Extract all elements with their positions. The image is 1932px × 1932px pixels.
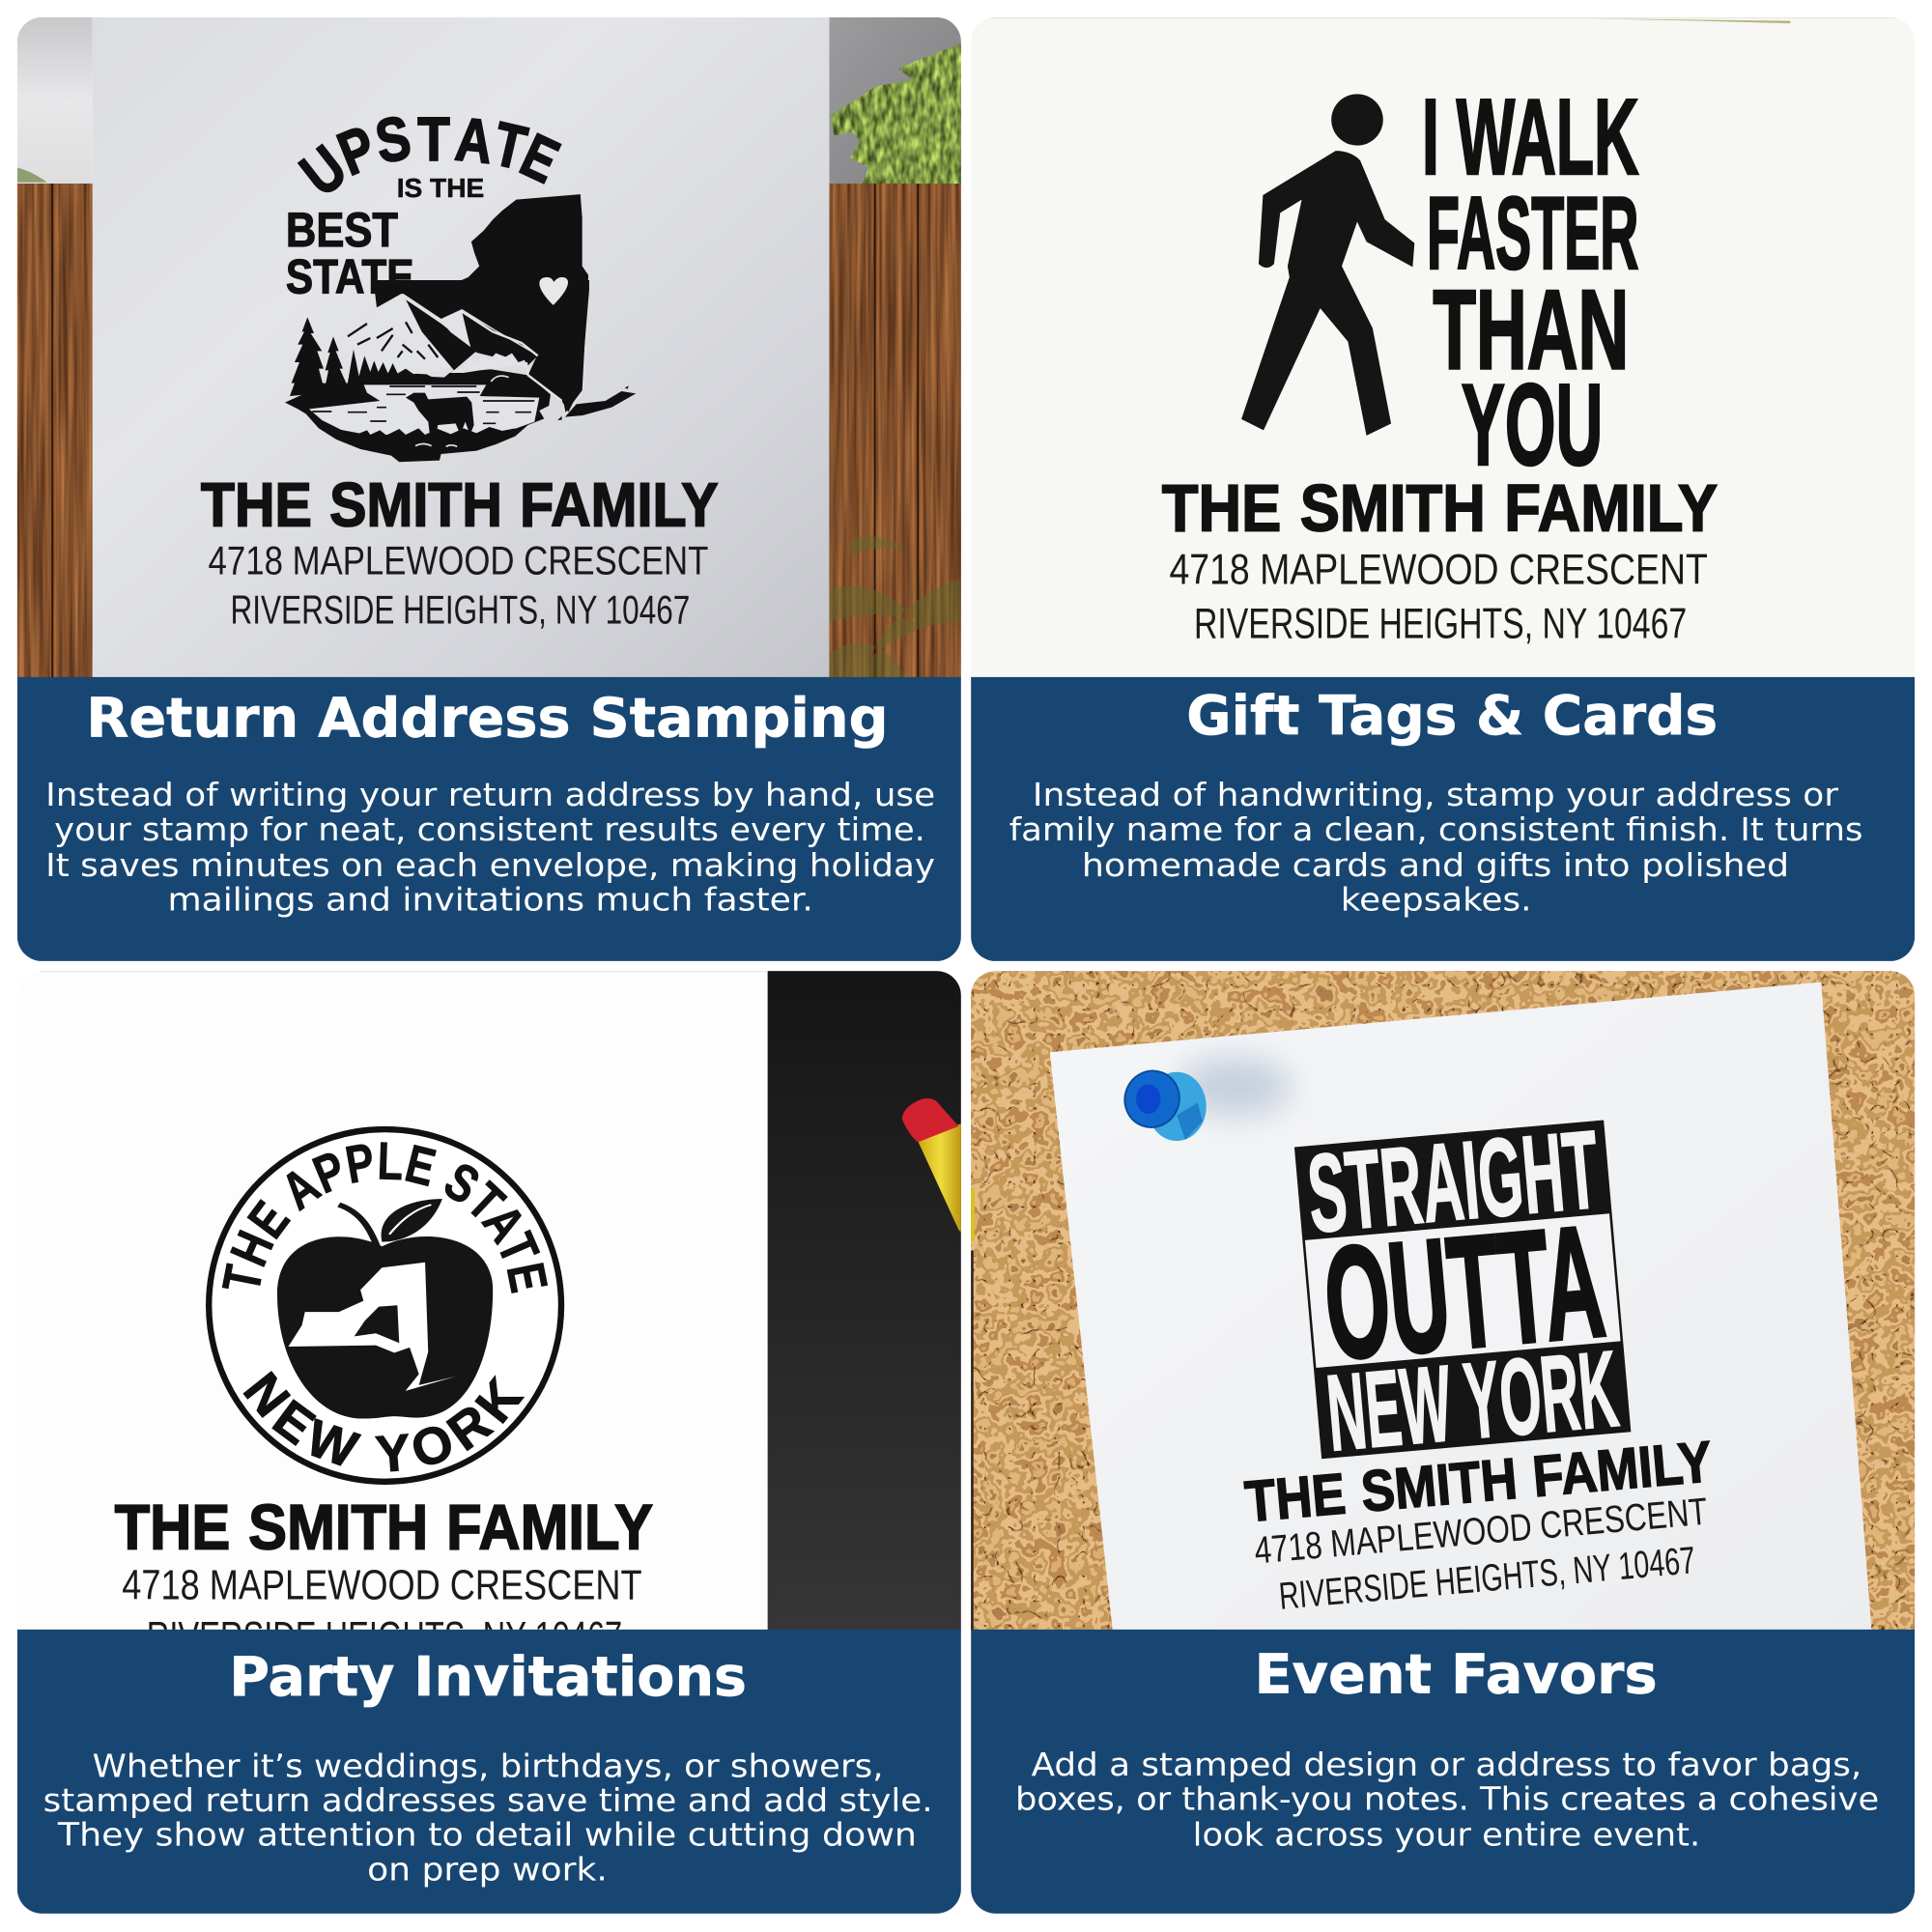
panel: Party Invitations [17,971,961,1914]
lower black landscape [285,350,551,462]
address line 2: RIVERSIDE HEIGHTS, NY 10467 [1277,1539,1697,1618]
label: BEST STATE [286,212,412,295]
black text box [1293,1107,1633,1475]
heading: Event Favors [1254,1644,1658,1707]
description: Whether it’s weddings, birthdays, or showers, [93,1747,884,1784]
description: family name for a clean, consistent finish. It turns [1009,811,1863,848]
icon: apple with New York state [277,1199,493,1419]
description [1015,1747,1879,1854]
mountains [352,350,426,375]
label: BEST STATE: STATE [286,250,414,304]
curved heading: UPSTATE: P [329,113,385,189]
illustration: New York state outline [462,194,589,412]
address line 2 (cut off): RIVERSIDE HEIGHTS, NY 10467 [147,1614,622,1661]
address line 2: RIVERSIDE HEIGHTS, NY 10467 [231,586,690,632]
description: boxes, or thank-you notes. This creates a cohesive [1015,1781,1879,1818]
curved heading: UPSTATE: T [487,109,532,184]
description: It saves minutes on each envelope, making holiday [45,847,935,884]
heading: Return Address Stamping [86,688,889,751]
stamp artwork: Straight Outta New York [1242,1107,1715,1618]
stamp artwork: I walk faster than you [1162,77,1718,648]
description [43,1747,933,1888]
heading: Gift Tags & Cards [1186,685,1718,748]
slogan: YOU [1462,360,1603,490]
photo: white card, dark surface and pencil [17,971,963,1631]
address line 1: 4718 MAPLEWOOD CRESCENT [1169,547,1708,594]
caption box [17,677,961,962]
black text box: NEW YORK [1322,1327,1623,1474]
trees [290,317,348,396]
description: stamped return addresses save time and add style. [43,1782,933,1819]
caption box [17,1630,961,1915]
family name: THE SMITH FAMILY [201,470,719,540]
caption box [971,1630,1915,1915]
photo: card background [971,17,1915,678]
slogan: THAN [1433,266,1629,392]
family name: THE SMITH FAMILY [1162,471,1718,546]
word: OUTTA: OUTTA [1318,1191,1610,1393]
address line 2: RIVERSIDE HEIGHTS, NY 10467 [1194,601,1687,648]
description: mailings and invitations much faster. [167,882,813,919]
word: STRAIGHT: STRAIGHT [1303,1108,1604,1256]
stamp artwork: The Apple State seal [114,1126,653,1630]
description: on prep work. [367,1851,608,1888]
description [1009,777,1863,919]
curved heading: UPSTATE: U [288,132,359,210]
icon: walking figure [1241,94,1414,436]
slogan: I WALK [1422,77,1638,197]
illustration: mountain lake scene [285,280,636,462]
icon: pencil [902,1098,963,1235]
description: keepsakes. [1341,882,1531,919]
address line 1: 4718 MAPLEWOOD CRESCENT [209,537,708,582]
slogan: FASTER [1427,175,1638,291]
family name: THE SMITH FAMILY [115,1492,653,1563]
curved text: THE APPLE STATE: THE APPLE STATE [222,1142,549,1293]
rock [483,396,551,397]
description: homemade cards and gifts into polished [1082,847,1789,884]
label: BEST STATE: BEST [286,203,398,257]
panel: Return Address Stamping [17,17,962,962]
curved heading: UPSTATE: E [511,121,569,197]
curved heading: UPSTATE [298,116,562,193]
label: IS THE: IS THE [397,173,484,203]
description [45,777,935,919]
description: Instead of writing your return address by hand, use [45,777,935,813]
curved text: NEW YORK: NEW YORK [242,1371,526,1472]
caption box [971,677,1915,962]
address line 1: 4718 MAPLEWOOD CRESCENT [1253,1491,1709,1573]
stamp artwork: Upstate is the best state [201,103,719,632]
pin shadow [1178,1057,1292,1117]
panel: Event Favors [971,971,1915,1915]
description: Add a stamped design or address to favor bags, [1032,1747,1861,1783]
curved heading: UPSTATE: T [417,104,450,174]
heading: Party Invitations [229,1646,747,1709]
icon: blue push pin [1117,1064,1207,1141]
family name: THE SMITH FAMILY [1242,1429,1715,1534]
description: Instead of handwriting, stamp your address or [1033,777,1839,813]
description: They show attention to detail while cutting down [57,1817,917,1854]
long island [557,385,636,420]
icon: heart [539,277,568,305]
photo: cork board with pinned paper [971,971,1915,1632]
panel: Gift Tags & Cards [971,17,1915,962]
description: look across your entire event. [1193,1817,1700,1854]
address line 1: 4718 MAPLEWOOD CRESCENT [122,1563,642,1609]
curved heading: UPSTATE: A [452,105,496,177]
photo: stamped paper against fence [17,17,962,678]
seal ring [209,1129,561,1482]
cow [406,393,474,437]
slogan [1422,77,1638,490]
lake [309,384,539,437]
description: your stamp for neat, consistent results every time. [54,811,925,848]
curved heading: UPSTATE: S [371,103,415,177]
